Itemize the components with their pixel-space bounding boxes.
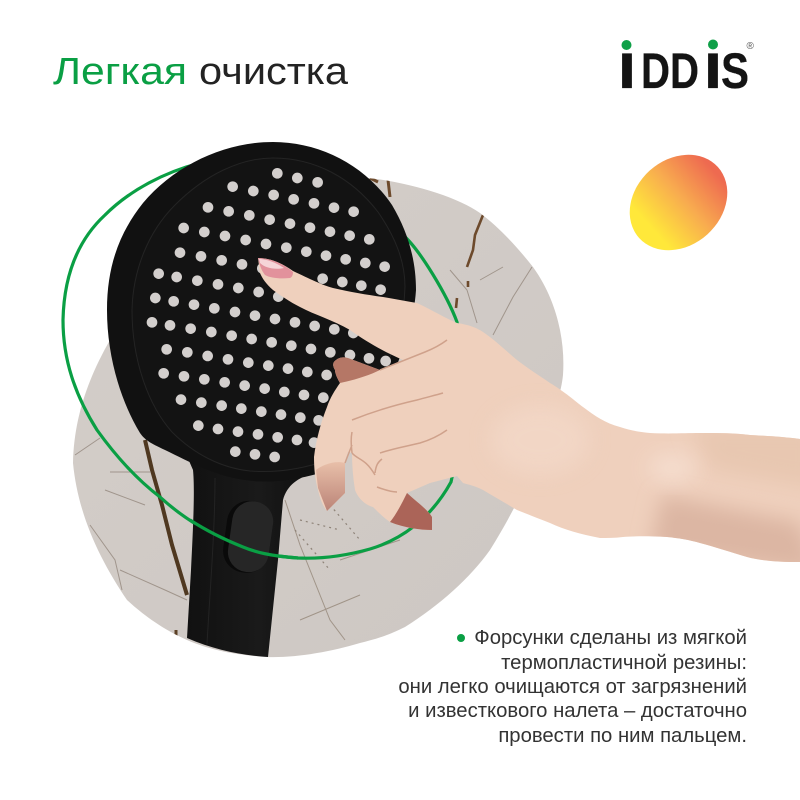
- bullet dot: [457, 634, 465, 642]
- head inner face: [132, 158, 405, 472]
- hand silhouette: [258, 258, 800, 562]
- title: [53, 51, 349, 93]
- body text: Форсунки сделаны из мягкой: [474, 627, 747, 649]
- hole between fingers: [380, 438, 420, 462]
- nozzles: [147, 168, 391, 462]
- skin shading: [514, 426, 800, 562]
- title: Легкая: [53, 51, 187, 93]
- ring segment over handle: [190, 520, 298, 558]
- body text: [398, 627, 747, 747]
- marble background: [60, 170, 580, 670]
- body text: они легко очищаются от загрязнений: [398, 676, 747, 698]
- logo: IDDIS: [618, 40, 754, 99]
- body text: термопластичной резины:: [501, 652, 747, 674]
- curled finger nail: [333, 357, 380, 383]
- finger creases: [345, 340, 447, 492]
- logo: IDDIS: ®: [746, 41, 754, 52]
- handle: [180, 440, 313, 657]
- body text: и известкового налета – достаточно: [408, 700, 747, 722]
- logo: IDDIS: I: [704, 43, 722, 99]
- ring finger nail: [390, 493, 432, 530]
- green ring outline: [63, 160, 462, 558]
- hand: [258, 258, 800, 575]
- logo: IDDIS: I: [618, 43, 636, 99]
- title: очистка: [199, 51, 349, 93]
- logo: IDDIS: S: [721, 43, 749, 99]
- index fingernail: [258, 258, 293, 278]
- head body: [107, 142, 416, 482]
- curled finger tip: [316, 462, 345, 511]
- handle button: [220, 498, 276, 576]
- shower head: [107, 142, 416, 657]
- logo: IDDIS: D: [641, 43, 670, 99]
- body text: провести по ним пальцем.: [498, 725, 747, 747]
- logo: IDDIS: D: [670, 43, 699, 99]
- marble cracks: [75, 178, 532, 640]
- gradient blob: [610, 135, 747, 270]
